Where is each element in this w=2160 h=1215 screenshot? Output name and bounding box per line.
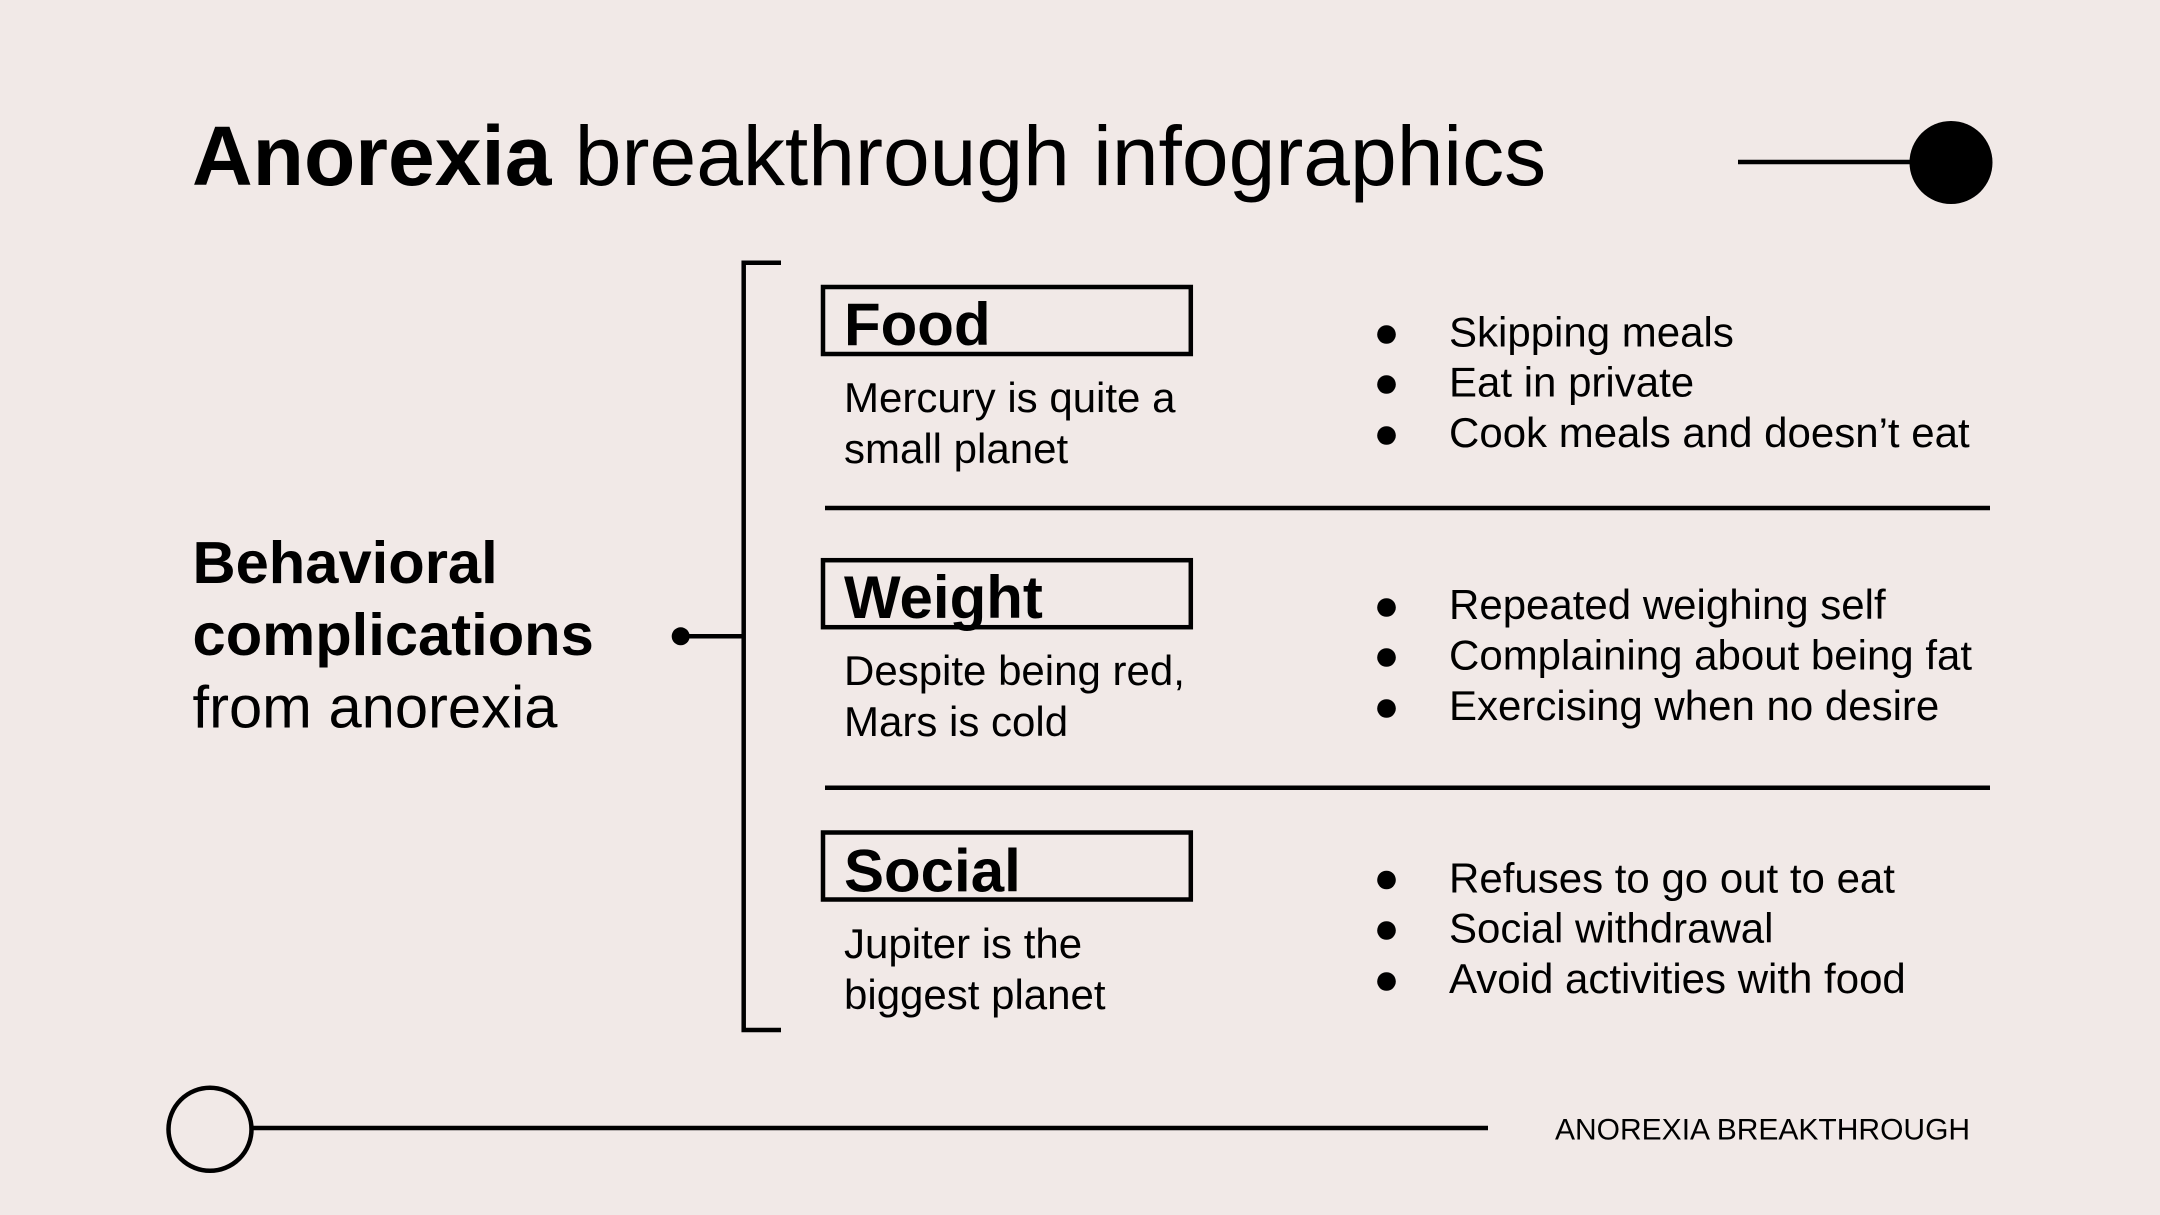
food bullet list: Eat in private	[1449, 358, 1694, 406]
panel: social	[823, 832, 1906, 1018]
panel: weight	[823, 560, 1972, 745]
weight label box: Weight	[844, 564, 1043, 631]
social bullet list: Social withdrawal	[1449, 905, 1773, 952]
heading: behavioral complications: from anorexia	[192, 674, 558, 740]
footer label: ANOREXIA BREAKTHROUGH	[1555, 1114, 1970, 1146]
social label box: Social	[844, 838, 1021, 904]
panel: food	[823, 287, 1970, 472]
food description: small planet	[844, 425, 1068, 472]
icon: bottom left outlined circle with line	[168, 1088, 1488, 1171]
bracket connector	[672, 263, 781, 1030]
food label box	[823, 287, 1191, 358]
social description: Jupiter is the	[844, 920, 1082, 967]
weight bullet list: Repeated weighing self	[1449, 581, 1886, 628]
food bullet list	[1377, 308, 1970, 456]
social bullet list	[1377, 854, 1906, 1002]
food bullet list: Skipping meals	[1449, 308, 1734, 356]
weight description: Mars is cold	[844, 698, 1068, 745]
social label box	[823, 832, 1191, 904]
food label box: Food	[844, 291, 991, 358]
weight bullet list	[1377, 581, 1972, 729]
weight bullet list: Exercising when no desire	[1449, 682, 1939, 729]
social bullet list: Avoid activities with food	[1449, 955, 1906, 1002]
icon: top right line with filled circle	[1738, 121, 1992, 204]
heading: behavioral complications: Behavioral	[192, 529, 498, 596]
food description: Mercury is quite a	[844, 374, 1176, 421]
heading: behavioral complications: complications	[192, 601, 594, 668]
weight description: Despite being red,	[844, 647, 1185, 694]
weight label box	[823, 560, 1191, 631]
weight bullet list: Complaining about being fat	[1449, 632, 1972, 678]
social bullet list: Refuses to go out to eat	[1449, 854, 1895, 902]
food bullet list: Cook meals and doesn’t eat	[1449, 409, 1970, 456]
social description: biggest planet	[844, 971, 1106, 1018]
title: Anorexia breakthrough infographics	[192, 109, 1546, 203]
